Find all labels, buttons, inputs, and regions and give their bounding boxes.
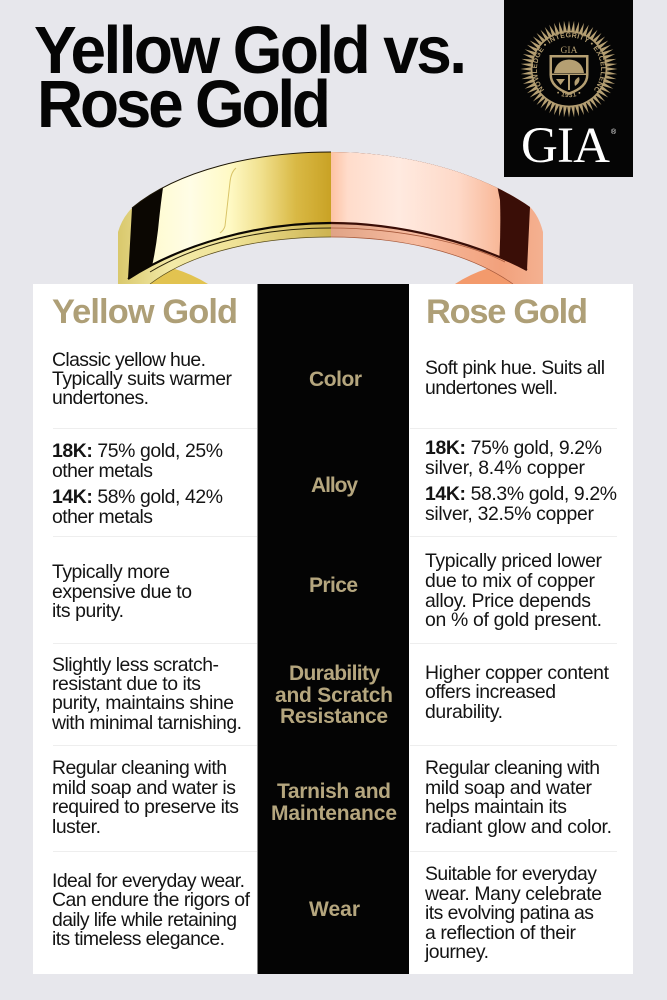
rose gold: price: Typically priced lower	[425, 550, 603, 572]
yellow gold: wear: daily life while retaining	[52, 909, 237, 931]
rose gold: price: on % of gold present.	[425, 609, 602, 631]
ring rim and edge, rose half	[331, 152, 543, 284]
row dividers, yellow column	[53, 428, 257, 852]
yellow gold: durability: Slightly less scratch-	[52, 654, 219, 676]
label: Durability and Scratch Resistance: and Scratch	[275, 684, 393, 707]
rose gold: price: due to mix of copper	[425, 570, 596, 592]
row dividers, rose column	[410, 428, 617, 852]
yellow gold: color: undertones.	[52, 387, 149, 409]
yellow gold: alloy: 14K: 58% gold, 42%	[52, 486, 223, 508]
center black column	[258, 284, 409, 974]
yellow gold: color: Typically suits warmer	[52, 368, 233, 390]
yellow gold: alloy: other metals	[52, 460, 153, 482]
ring back inner band, yellow	[150, 268, 208, 284]
rose gold: tarnish: helps maintain its	[425, 796, 567, 818]
rose gold: price	[425, 550, 603, 631]
ring face dark reflection, yellow	[128, 152, 331, 279]
yellow gold: wear	[52, 870, 251, 950]
label: Wear: Wear	[309, 898, 360, 921]
heading: Yellow Gold: Yellow Gold	[52, 293, 238, 331]
rose gold: wear: journey.	[424, 941, 489, 963]
yellow gold: price: Typically more	[52, 561, 170, 583]
rose gold: wear: a reflection of their	[425, 922, 577, 944]
yellow gold: durability: with minimal tarnishing.	[51, 712, 242, 734]
title: Yellow Gold vs.	[34, 13, 467, 87]
yellow gold: durability	[51, 654, 242, 734]
rose gold: color	[425, 357, 605, 399]
label: Price: Price	[309, 574, 358, 597]
comparison table panel	[33, 284, 633, 974]
title	[34, 13, 467, 141]
yellow gold: durability: resistant due to its	[52, 673, 201, 695]
label: Durability and Scratch Resistance: Durability	[289, 662, 380, 685]
rose gold: wear: wear. Many celebrate	[424, 883, 602, 905]
rose gold: tarnish: radiant glow and color.	[425, 816, 612, 838]
yellow gold: wear: Ideal for everyday wear.	[52, 870, 245, 892]
ring illustration	[118, 152, 543, 284]
yellow gold: price	[52, 561, 192, 622]
GIA logo block: GIA	[561, 46, 578, 56]
ring band highlights	[132, 152, 331, 208]
GIA logo block: • 1931 •	[557, 92, 580, 98]
rose gold: tarnish: Regular cleaning with	[425, 757, 600, 779]
label: Alloy: Alloy	[311, 474, 358, 497]
ring face crease	[220, 168, 236, 233]
label: Tarnish and Maintenance: Tarnish and	[277, 780, 391, 803]
heading: Rose Gold: Rose Gold	[426, 293, 588, 331]
yellow gold: price: its purity.	[52, 600, 124, 622]
yellow gold: color	[52, 349, 233, 409]
yellow gold: durability: purity, maintains shine	[52, 692, 234, 714]
yellow gold: tarnish: mild soap and water is	[52, 777, 236, 799]
rose gold: alloy: silver, 8.4% copper	[425, 457, 586, 479]
ring face, yellow	[152, 152, 331, 264]
rose gold: alloy: silver, 32.5% copper	[425, 503, 595, 525]
yellow gold: alloy: 18K: 75% gold, 25%	[52, 440, 223, 462]
GIA logo block	[504, 0, 633, 177]
rose gold: alloy: 14K: 58.3% gold, 9.2%	[425, 483, 617, 505]
rose gold: durability: Higher copper content	[425, 662, 610, 684]
rose gold: wear	[424, 863, 602, 963]
ring back inner band, rose	[455, 268, 513, 284]
label: Color: Color	[309, 368, 362, 391]
yellow gold: alloy	[52, 440, 223, 528]
rose gold: wear: its evolving patina as	[425, 902, 594, 924]
rose gold: price: alloy. Price depends	[425, 590, 591, 612]
yellow gold: tarnish: Regular cleaning with	[52, 757, 227, 779]
rose gold: alloy: 18K: 75% gold, 9.2%	[425, 437, 602, 459]
ring face, rose	[331, 152, 500, 256]
rose gold: durability: offers increased	[425, 681, 556, 703]
rose gold: color: Soft pink hue. Suits all	[425, 357, 605, 379]
yellow gold: color: Classic yellow hue.	[52, 349, 206, 371]
GIA logo block: GIA	[521, 118, 610, 174]
rose gold: durability	[425, 662, 610, 723]
yellow gold: wear: its timeless elegance.	[52, 928, 225, 950]
title: Rose Gold	[37, 67, 331, 141]
rose gold: tarnish: mild soap and water	[425, 777, 593, 799]
GIA logo block: ®	[611, 128, 617, 136]
yellow gold: tarnish	[52, 757, 239, 838]
yellow gold: wear: Can endure the rigors of	[52, 889, 251, 911]
label: Tarnish and Maintenance: Maintenance	[271, 802, 397, 825]
yellow gold: tarnish: luster.	[52, 816, 101, 838]
yellow gold: tarnish: required to preserve its	[52, 796, 239, 818]
rose gold: tarnish	[425, 757, 612, 838]
rose gold: color: undertones well.	[425, 377, 558, 399]
rose gold: alloy	[425, 437, 617, 525]
label: Tarnish and Maintenance	[271, 780, 397, 825]
label: Durability and Scratch Resistance	[275, 662, 393, 728]
rose gold: wear: Suitable for everyday	[425, 863, 597, 885]
yellow gold: alloy: other metals	[52, 506, 153, 528]
rose gold: durability: durability.	[425, 701, 503, 723]
yellow gold: price: expensive due to	[52, 581, 192, 603]
ring rim and edge, yellow half	[118, 152, 331, 284]
ring face dark reflection, rose	[331, 152, 530, 270]
label: Durability and Scratch Resistance: Resistance	[280, 705, 388, 728]
